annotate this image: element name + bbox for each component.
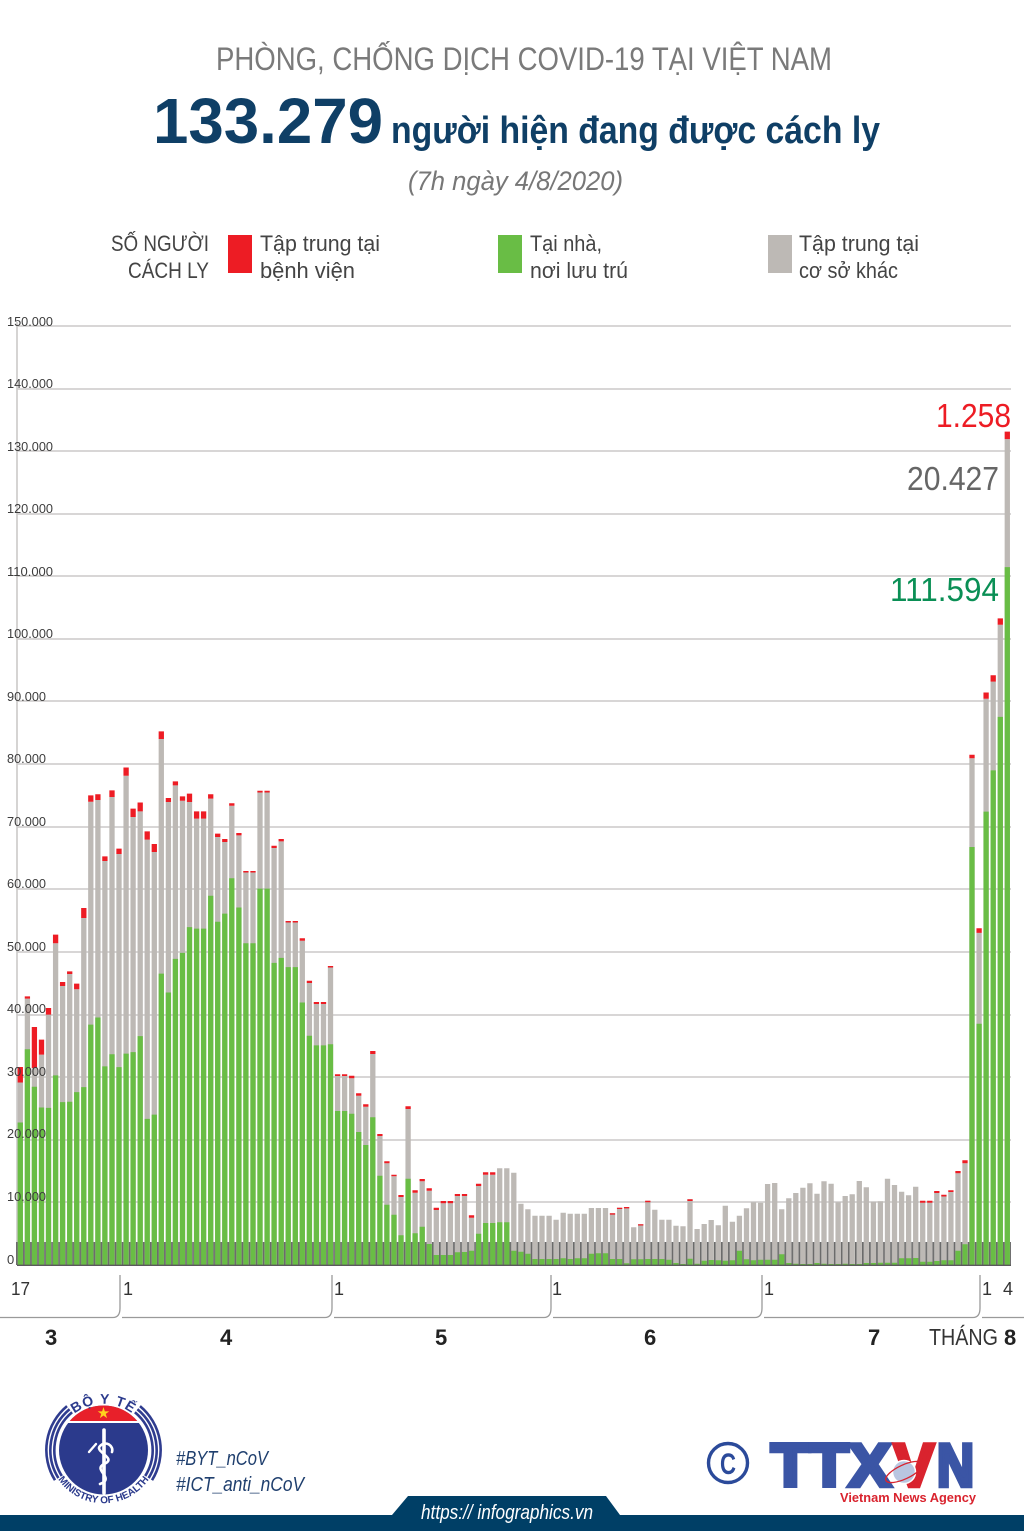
x axis: [0, 1275, 1024, 1350]
logo: Ministry of Health: [45, 1394, 162, 1504]
y axis labels: 120.000: [7, 501, 53, 516]
name arc top: BỘ Y TẾ: [70, 1394, 138, 1413]
axis title: SỐ NGƯỜI: [111, 230, 209, 256]
emblem arcs: [46, 1406, 161, 1480]
legend: hospital: Tập trung tại: [260, 231, 380, 256]
month brackets: [0, 1275, 1024, 1318]
legend: [111, 230, 919, 283]
legend: home: nơi lưu trú: [530, 258, 628, 283]
series: other facilities: [20, 439, 1007, 1265]
y axis labels: 30.000: [7, 1064, 46, 1079]
day ticks: 1: [764, 1279, 774, 1299]
y axis labels: 90.000: [7, 689, 46, 704]
day ticks: 4: [1003, 1279, 1013, 1299]
headline text: người hiện đang được cách ly: [391, 110, 880, 152]
day ticks: 17: [11, 1279, 30, 1299]
series: hospital: [20, 432, 1007, 1226]
series: home: [20, 567, 1007, 1265]
month labels: THÁNG: [929, 1324, 998, 1350]
emblem disc: [59, 1406, 148, 1494]
wordmark: [771, 1432, 974, 1499]
axis title: [111, 230, 209, 283]
headline number: 133.279: [153, 85, 383, 157]
legend: hospital: bệnh viện: [260, 258, 355, 283]
month labels: 5: [435, 1325, 447, 1350]
month labels: 7: [868, 1325, 880, 1350]
y axis labels: 20.000: [7, 1126, 46, 1141]
y axis labels: 150.000: [7, 314, 53, 329]
wordmark: N: [937, 1432, 974, 1499]
hashtags: #BYT_nCoV: [176, 1448, 269, 1470]
month labels: 6: [644, 1325, 656, 1350]
legend: other facilities: cơ sở khác: [799, 258, 898, 283]
copyright mark: [708, 1444, 748, 1482]
name arc bottom: MINISTRY OF HEALTH: [58, 1476, 148, 1504]
y axis labels: 110.000: [7, 564, 53, 579]
footer band: [0, 1496, 1024, 1531]
stacked bar chart: [7, 314, 1011, 1267]
legend: home: Tại nhà,: [530, 231, 602, 256]
hashtags: [176, 1448, 305, 1496]
legend: hospital: [228, 231, 380, 283]
legend: other facilities: Tập trung tại: [799, 231, 919, 256]
y axis labels: 100.000: [7, 626, 53, 641]
y axis labels: 40.000: [7, 1001, 46, 1016]
website: https:// infographics.vn: [421, 1502, 593, 1524]
wordmark: V: [894, 1432, 934, 1499]
y axis labels: 0: [7, 1252, 14, 1267]
star: ★: [97, 1405, 110, 1422]
y axis labels: 60.000: [7, 876, 46, 891]
staff and serpent: [89, 1430, 112, 1493]
month labels: 8: [1004, 1325, 1016, 1350]
day ticks: 1: [334, 1279, 344, 1299]
logo: TTXVN: [771, 1432, 977, 1505]
tagline: Vietnam News Agency: [840, 1490, 977, 1505]
value label: hospital: 1.258: [936, 397, 1011, 434]
value label: other facilities: 20.427: [907, 460, 999, 497]
wordmark: TTX: [771, 1432, 891, 1499]
y axis labels: 140.000: [7, 376, 53, 391]
month labels: 3: [45, 1325, 57, 1350]
month labels: 4: [220, 1325, 233, 1350]
axis title: CÁCH LY: [128, 258, 209, 283]
y axis labels: 50.000: [7, 939, 46, 954]
y axis labels: 70.000: [7, 814, 46, 829]
date: (7h ngày 4/8/2020): [408, 166, 623, 196]
day ticks: [11, 1279, 1013, 1299]
title: [153, 41, 880, 196]
hashtags: #ICT_anti_nCoV: [176, 1474, 305, 1496]
heading: topic: PHÒNG, CHỐNG DỊCH COVID-19 TẠI VIỆT NAM: [216, 41, 832, 77]
y axis labels: 10.000: [7, 1189, 46, 1204]
day ticks: 1: [552, 1279, 562, 1299]
day ticks: 1: [123, 1279, 133, 1299]
y axis labels: [7, 314, 53, 1267]
y axis labels: 80.000: [7, 751, 46, 766]
y axis labels: 130.000: [7, 439, 53, 454]
month labels: [45, 1324, 1016, 1350]
globe: [883, 1457, 925, 1487]
legend: home: [498, 231, 628, 283]
value label: home: 111.594: [890, 571, 999, 608]
legend: other facilities: [768, 231, 919, 283]
day ticks: 1: [982, 1279, 992, 1299]
copyright mark: C: [720, 1448, 736, 1481]
